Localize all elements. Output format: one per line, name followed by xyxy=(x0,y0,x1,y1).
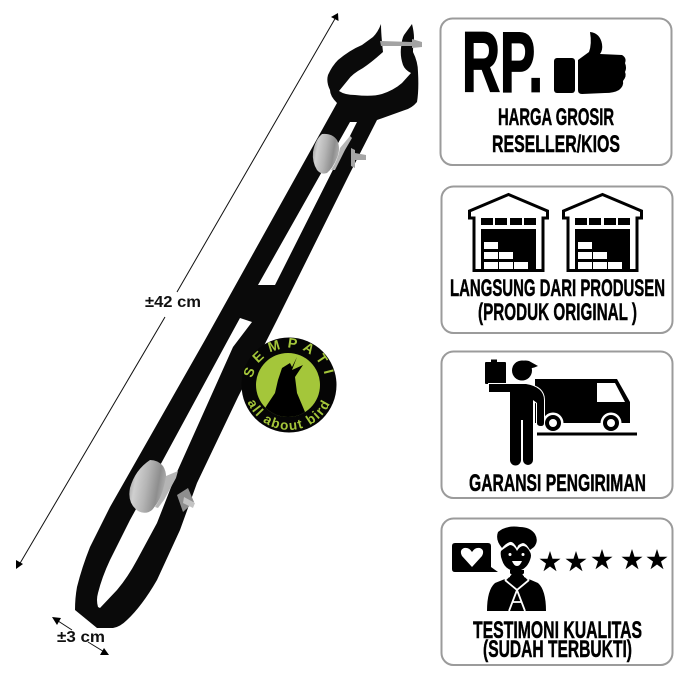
heading: harga grosir: HARGA GROSIR xyxy=(498,104,614,131)
icon: courier with package xyxy=(485,360,544,466)
dimension arrows: width 3 cm xyxy=(52,617,109,655)
panel: wholesale price xyxy=(440,16,672,165)
bird silhouette xyxy=(266,357,305,417)
upper wing nut xyxy=(351,148,366,168)
icon: warehouse right xyxy=(564,194,642,270)
lower nut xyxy=(177,488,194,512)
label: 42 cm: ±42 cm xyxy=(145,294,201,311)
icon: warehouse left xyxy=(470,194,548,270)
big text: RP.: RP. xyxy=(462,16,543,110)
icon: smiling man xyxy=(487,527,546,611)
icon: thumbs up xyxy=(554,32,626,94)
icon: delivery truck xyxy=(535,379,637,436)
heading: reseller/kios: RESELLER/KIOS xyxy=(492,131,620,158)
icon: speech bubble with heart xyxy=(452,543,498,572)
dimension arrow: length 42 cm xyxy=(16,13,338,569)
lower pulley xyxy=(129,460,178,513)
label: 3 cm: ±3 cm xyxy=(57,629,105,646)
panel: direct from producer xyxy=(442,186,672,333)
upper pulley xyxy=(313,134,352,174)
icon: five stars xyxy=(540,549,668,571)
top clamp bolt xyxy=(380,39,422,48)
logo text: SEMPATI: SEMPATI xyxy=(244,338,334,378)
panel: delivery guarantee xyxy=(442,352,672,498)
panel: quality testimonials xyxy=(442,518,672,665)
product: black metal hanger with clamp and pulleys xyxy=(75,24,422,628)
logo text: all about bird: all about bird xyxy=(248,400,330,430)
metal strap frame xyxy=(75,24,418,628)
logo: Sempati all about bird xyxy=(242,338,336,432)
